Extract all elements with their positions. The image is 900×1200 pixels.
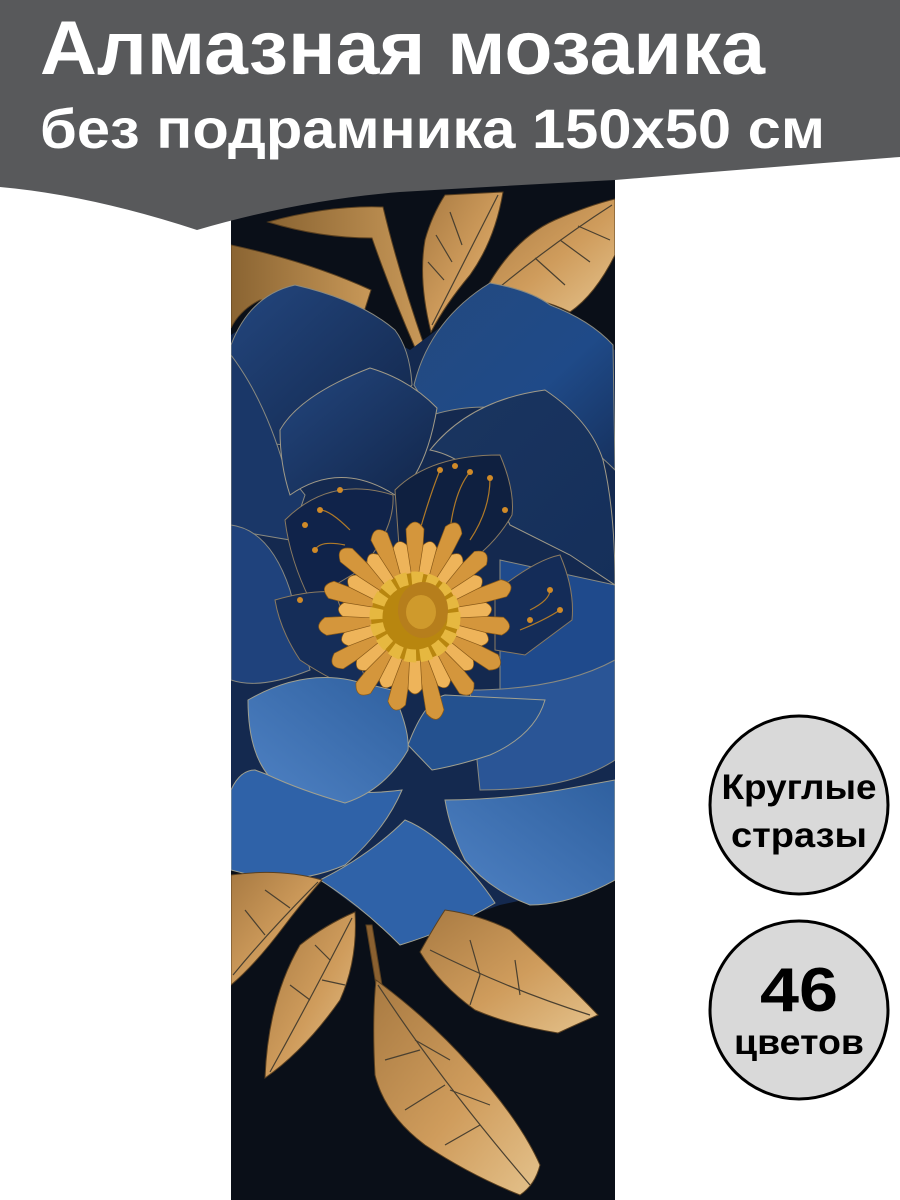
icon: blue flower base xyxy=(231,290,615,940)
icon: gold dots and stamens xyxy=(297,463,563,630)
badge: 46 colours xyxy=(710,921,888,1099)
badge: round rhinestones xyxy=(710,716,888,894)
badge: round rhinestones: стразы xyxy=(731,816,867,855)
icon: bottom gold leaves xyxy=(231,872,598,1195)
icon: outer blue petals xyxy=(231,283,615,790)
header banner xyxy=(0,0,900,230)
badge: 46 colours: 46 xyxy=(760,956,838,1025)
title: Алмазная мозаика xyxy=(40,6,766,91)
icon: inner dark petals with gold dots xyxy=(275,455,572,698)
icon: lower blue petals xyxy=(231,678,615,945)
icon: top leaf veins xyxy=(428,195,612,325)
icon: top gold leaves xyxy=(231,192,615,350)
badge: 46 colours: цветов xyxy=(734,1023,864,1062)
panel: flower picture xyxy=(231,180,615,1200)
subtitle: без подрамника 150х50 см xyxy=(40,97,825,160)
icon: bottom leaf veins xyxy=(233,882,590,1185)
icon: flower centre rays xyxy=(318,520,514,721)
icon: middle blue petals xyxy=(280,368,615,585)
badge: round rhinestones: Круглые xyxy=(722,768,876,807)
